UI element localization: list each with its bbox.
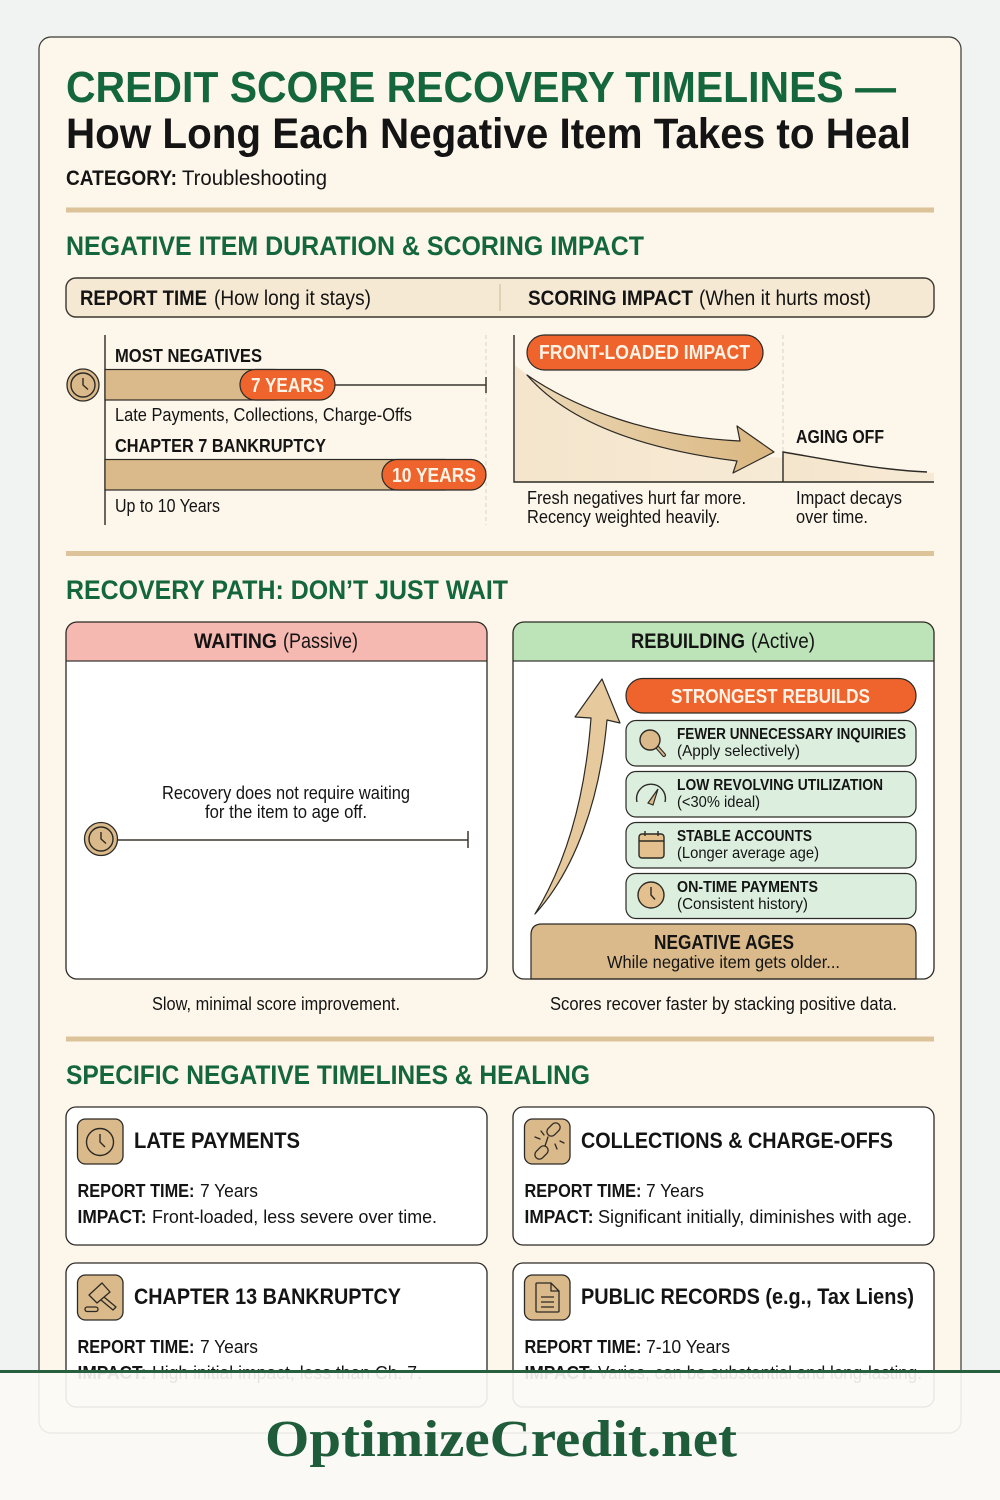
pill: front-loaded impact	[527, 335, 763, 370]
pill: front-loaded impact: FRONT-LOADED IMPACT	[539, 342, 750, 364]
card: public records: PUBLIC RECORDS (e.g., Tax Liens)	[581, 1284, 914, 1309]
arrow: rising recovery	[535, 679, 620, 914]
text: late payments list: Late Payments, Collections, Charge-Offs	[115, 405, 412, 425]
card: chapter 13 bankruptcy: IMPACT:	[78, 1363, 146, 1383]
arrow: front-loaded decline	[527, 375, 774, 473]
card: late payments: REPORT TIME:	[78, 1181, 194, 1201]
chart: scoring impact decay	[514, 335, 934, 527]
header bar: report time and scoring impact: (How long it stays)	[214, 287, 371, 310]
icon: gavel	[78, 1275, 123, 1320]
card: stable accounts: STABLE ACCOUNTS	[677, 828, 812, 845]
block: negative ages: While negative item gets older...	[607, 952, 840, 972]
category line: Troubleshooting	[182, 167, 327, 190]
card: on-time payments: ON-TIME PAYMENTS	[677, 879, 818, 896]
card: public records: IMPACT:	[524, 1363, 594, 1383]
text: fresh negatives: Fresh negatives hurt far more.	[527, 488, 746, 508]
text: impact decays: Impact decays	[796, 488, 902, 508]
card: late payments: Front-loaded, less severe over time.	[152, 1207, 437, 1227]
bar: 7 years: 7 YEARS	[251, 375, 324, 397]
timeline: flat waiting line	[84, 822, 468, 856]
card: on-time payments: (Consistent history)	[677, 896, 808, 913]
card: chapter 13 bankruptcy	[66, 1263, 487, 1407]
title	[66, 63, 911, 158]
card: low utilization: LOW REVOLVING UTILIZATION	[677, 777, 883, 794]
card: public records: Varies, can be substantial and long-lasting.	[598, 1363, 922, 1383]
card: collections and charge-offs	[513, 1107, 934, 1245]
text: recovery note	[162, 783, 410, 822]
text: up to 10 years: Up to 10 Years	[115, 496, 220, 516]
heading: specific timelines: SPECIFIC NEGATIVE TIMELINES & HEALING	[66, 1060, 590, 1090]
panel: waiting: (Passive)	[283, 630, 358, 653]
bar: 10 years	[105, 460, 486, 490]
card: fewer inquiries	[626, 720, 916, 766]
category line: CATEGORY:	[66, 167, 177, 190]
bar: 10 years: 10 YEARS	[392, 465, 476, 487]
title: CREDIT SCORE RECOVERY TIMELINES —	[66, 63, 896, 112]
card: chapter 13 bankruptcy: REPORT TIME:	[78, 1337, 194, 1357]
header bar: report time and scoring impact	[66, 278, 934, 317]
pill: strongest rebuilds	[626, 678, 916, 713]
icon: clock	[78, 1119, 123, 1164]
card: chapter 13 bankruptcy: CHAPTER 13 BANKRUPTCY	[134, 1284, 401, 1309]
text: fresh negatives	[527, 488, 746, 527]
card: stable accounts	[626, 822, 916, 868]
label: most negatives: MOST NEGATIVES	[115, 345, 262, 366]
header bar: report time and scoring impact: REPORT TIME	[80, 287, 207, 310]
card: fewer inquiries: FEWER UNNECESSARY INQUIRIES	[677, 726, 906, 743]
card: late payments	[66, 1107, 487, 1245]
text: recovery note: for the item to age off.	[205, 802, 367, 822]
category line	[66, 167, 327, 190]
heading: recovery path: RECOVERY PATH: DON’T JUST WAIT	[66, 575, 508, 605]
bar: 7 years	[105, 370, 486, 400]
icon: document	[524, 1275, 570, 1320]
card: stable accounts: (Longer average age)	[677, 845, 819, 862]
heading: negative item duration: NEGATIVE ITEM DURATION & SCORING IMPACT	[66, 231, 644, 261]
card: collections and charge-offs: COLLECTIONS & CHARGE-OFFS	[581, 1128, 893, 1153]
card: low utilization	[626, 772, 916, 817]
text: recovery note: Recovery does not require waiting	[162, 783, 410, 803]
card: late payments: LATE PAYMENTS	[134, 1128, 300, 1153]
icon: broken chain	[524, 1119, 570, 1164]
card: late payments: 7 Years	[200, 1181, 258, 1201]
footer brand: OptimizeCredit.net	[265, 1411, 738, 1468]
label: aging off: AGING OFF	[796, 426, 884, 447]
text: impact decays: over time.	[796, 507, 868, 527]
card: collections and charge-offs: REPORT TIME:	[524, 1181, 642, 1201]
icon: clock	[67, 369, 99, 401]
card: low utilization: (<30% ideal)	[677, 794, 760, 811]
card: chapter 13 bankruptcy: 7 Years	[200, 1337, 258, 1357]
caption: waiting: Slow, minimal score improvement.	[152, 994, 400, 1014]
panel: rebuilding: (Active)	[751, 630, 815, 653]
card: collections and charge-offs: IMPACT:	[524, 1207, 594, 1227]
chart: report time bars	[67, 335, 486, 525]
text: fresh negatives: Recency weighted heavily.	[527, 507, 720, 527]
pill: strongest rebuilds: STRONGEST REBUILDS	[671, 686, 870, 708]
card: collections and charge-offs: Significant initially, diminishes with age.	[598, 1207, 912, 1227]
text: impact decays	[796, 488, 902, 527]
card: late payments: IMPACT:	[78, 1207, 146, 1227]
block: negative ages	[531, 924, 916, 979]
card: on-time payments	[626, 874, 916, 918]
panel: rebuilding	[513, 622, 934, 979]
block: negative ages: NEGATIVE AGES	[654, 932, 794, 954]
card: fewer inquiries: (Apply selectively)	[677, 743, 800, 760]
header bar: report time and scoring impact: SCORING IMPACT	[528, 287, 693, 310]
panel: rebuilding: REBUILDING	[631, 630, 745, 653]
card: public records: REPORT TIME:	[524, 1337, 642, 1357]
label: chapter 7 bankruptcy: CHAPTER 7 BANKRUPTCY	[115, 435, 327, 456]
card: chapter 13 bankruptcy: High initial impact, less than Ch. 7.	[152, 1363, 422, 1383]
panel: waiting: WAITING	[194, 630, 277, 653]
card: public records: 7-10 Years	[646, 1337, 730, 1357]
caption: rebuilding: Scores recover faster by stacking positive data.	[550, 994, 897, 1014]
title: How Long Each Negative Item Takes to Heal	[66, 110, 911, 158]
panel: waiting	[66, 622, 487, 979]
card: public records	[513, 1263, 934, 1407]
footer band	[0, 1370, 1000, 1500]
card: collections and charge-offs: 7 Years	[646, 1181, 704, 1201]
header bar: report time and scoring impact: (When it hurts most)	[699, 287, 871, 310]
